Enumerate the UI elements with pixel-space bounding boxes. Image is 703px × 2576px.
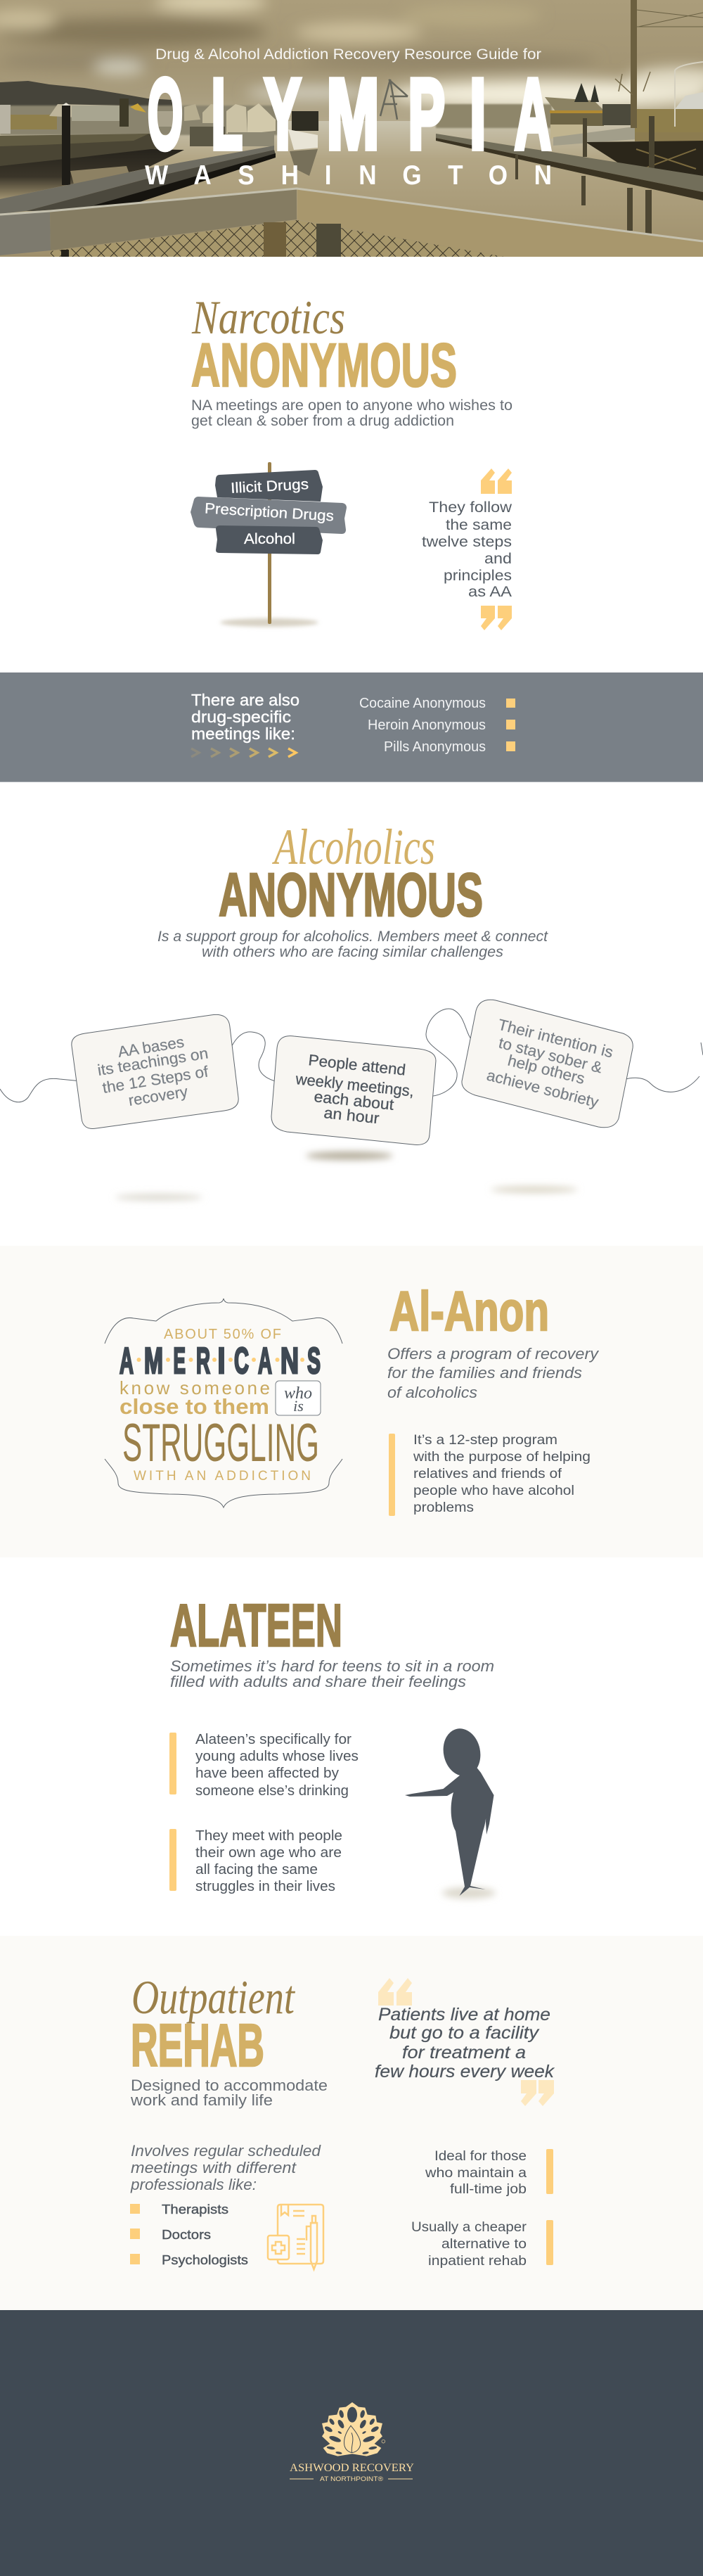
reflections bbox=[515, 155, 652, 234]
Americans: N bbox=[280, 1341, 299, 1382]
boat bbox=[288, 129, 318, 150]
intro text: NA meetings are open to anyone who wishes to bbox=[191, 397, 512, 414]
heading: Alcoholics: Alcoholics bbox=[272, 819, 435, 875]
accent bar bbox=[389, 1434, 395, 1516]
about 50 percent: ABOUT 50% OF bbox=[164, 1327, 281, 1342]
tag: stay sober: help others bbox=[506, 1052, 587, 1088]
quote text: principles bbox=[444, 567, 512, 584]
tag: weekly meetings: each about bbox=[313, 1088, 394, 1114]
icon: signpost: Alcohol bbox=[244, 531, 295, 547]
point: cheaper alternative: Usually a cheaper bbox=[411, 2220, 527, 2235]
tag: AA teachings: AA bases bbox=[117, 1033, 186, 1061]
hero title: Olympia: A bbox=[515, 58, 551, 170]
quote text: the same bbox=[446, 516, 512, 533]
point: same age: They meet with people bbox=[195, 1828, 342, 1844]
intro text: get clean & sober from a drug addiction bbox=[191, 413, 454, 429]
panel: Alcoholics Anonymous bbox=[0, 819, 703, 1201]
footer bbox=[0, 2310, 703, 2576]
point: cheaper alternative bbox=[411, 2220, 527, 2269]
intro text bbox=[387, 1345, 600, 1401]
icon: closing quote bbox=[521, 2080, 554, 2106]
point: same age: all facing the same bbox=[195, 1862, 318, 1877]
heading: Anonymous: ANONYMOUS bbox=[191, 331, 457, 400]
list of drug-specific groups bbox=[359, 696, 486, 755]
tag: stay sober: to stay sober & bbox=[497, 1034, 605, 1076]
Americans: R bbox=[196, 1341, 210, 1382]
list of drug-specific groups: Pills Anonymous bbox=[384, 739, 486, 755]
list of drug-specific groups: Heroin Anonymous bbox=[368, 718, 486, 733]
hero banner bbox=[0, 0, 703, 257]
intro text bbox=[191, 397, 512, 429]
intro text: Offers a program of recovery bbox=[387, 1345, 600, 1363]
quote text bbox=[375, 2005, 555, 2081]
tag shadows bbox=[115, 1152, 578, 1201]
quote text: Patients live at home bbox=[378, 2005, 550, 2025]
intro text: filled with adults and share their feelings bbox=[170, 1673, 466, 1690]
quote text: few hours every week bbox=[375, 2062, 555, 2081]
tag: AA teachings bbox=[72, 1014, 238, 1128]
12-step text: with the purpose of helping bbox=[413, 1450, 591, 1465]
hero title: Olympia: M bbox=[326, 58, 380, 170]
hero photo: marina bbox=[0, 0, 703, 257]
drug-specific heading bbox=[191, 691, 299, 743]
heading: Rehab: REHAB bbox=[131, 2013, 264, 2079]
intro text: for the families and friends bbox=[387, 1364, 582, 1382]
professionals text: Involves regular scheduled bbox=[131, 2142, 321, 2160]
tag: weekly meetings bbox=[271, 1036, 436, 1144]
point: full-time job: full-time job bbox=[450, 2182, 527, 2197]
who is box: who bbox=[284, 1384, 312, 1403]
tag: stay sober: Their intention is bbox=[496, 1016, 615, 1061]
Americans: C bbox=[234, 1341, 249, 1382]
know someone: know someone bbox=[120, 1377, 270, 1398]
tag: stay sober: achieve sobriety bbox=[485, 1066, 600, 1111]
icon: opening quote bbox=[378, 1978, 412, 2006]
hero title: Olympia: O bbox=[148, 58, 183, 170]
wires connecting the tags bbox=[0, 1009, 703, 1102]
icon: signpost bbox=[191, 462, 347, 627]
icon: person silhouette bbox=[405, 1725, 496, 1899]
accent bar bbox=[169, 1829, 176, 1891]
professionals text: meetings with different bbox=[131, 2159, 297, 2176]
point: same age bbox=[195, 1828, 342, 1894]
point: full-time job: Ideal for those bbox=[434, 2149, 527, 2164]
hero intro line: Drug & Alcohol Addiction Recovery Resource Guide for bbox=[155, 46, 541, 63]
tag: AA teachings: its teachings on bbox=[96, 1044, 209, 1079]
point: young adults: Alateen’s specifically for bbox=[195, 1732, 352, 1747]
crane bbox=[380, 79, 408, 120]
drug-specific heading: There are also bbox=[191, 691, 299, 709]
fence bbox=[51, 220, 504, 257]
struggling: STRUGGLING bbox=[122, 1413, 319, 1473]
tag: weekly meetings: People attend bbox=[307, 1051, 406, 1079]
quote text: as AA bbox=[468, 583, 512, 600]
heading: Narcotics: Narcotics bbox=[191, 291, 345, 344]
professionals list bbox=[130, 2202, 248, 2267]
accent bar bbox=[546, 2220, 553, 2265]
point: young adults: have been affected by bbox=[195, 1766, 339, 1781]
panel: Narcotics Anonymous bbox=[191, 291, 512, 630]
panel: Outpatient Rehab bbox=[0, 1936, 703, 2310]
railing bbox=[0, 211, 51, 255]
shore bbox=[0, 134, 176, 170]
intro text: of alcoholics bbox=[387, 1384, 477, 1401]
list bullets bbox=[506, 699, 515, 751]
tag: stay sober bbox=[462, 1000, 633, 1128]
professionals list: Doctors bbox=[162, 2227, 211, 2242]
drug-specific heading: meetings like: bbox=[191, 725, 295, 743]
point: full-time job bbox=[425, 2149, 527, 2197]
quote text: for treatment a bbox=[402, 2043, 526, 2062]
intro text bbox=[157, 929, 548, 960]
point: cheaper alternative: alternative to bbox=[441, 2237, 527, 2252]
hero title: Olympia: L bbox=[211, 58, 243, 170]
intro text: with others who are facing similar challenges bbox=[202, 944, 504, 960]
with an addiction: WITH AN ADDICTION bbox=[134, 1469, 311, 1484]
hero title: Olympia: P bbox=[408, 58, 445, 170]
panel: Alateen bbox=[169, 1593, 496, 1899]
panel: drug-specific meetings bbox=[0, 672, 703, 782]
close to them: close to them bbox=[120, 1394, 269, 1419]
logo rules bbox=[290, 2479, 413, 2480]
Americans: A bbox=[120, 1341, 134, 1382]
12-step text: people who have alcohol bbox=[413, 1484, 574, 1498]
logo wordmark: ASHWOOD RECOVERY bbox=[290, 2462, 414, 2474]
Americans: I bbox=[218, 1341, 225, 1382]
tag: AA teachings: the 12 Steps of bbox=[101, 1062, 210, 1097]
quote text: twelve steps bbox=[422, 533, 512, 550]
statistic badge bbox=[105, 1299, 342, 1507]
12-step text: It’s a 12-step program bbox=[413, 1433, 557, 1448]
intro text: Is a support group for alcoholics. Members meet & connect bbox=[157, 929, 548, 945]
professionals list: Psychologists bbox=[162, 2252, 248, 2267]
point: same age: their own age who are bbox=[195, 1845, 342, 1861]
heading: Al-Anon: Al-Anon bbox=[389, 1280, 549, 1342]
drug-specific heading: drug-specific bbox=[191, 708, 291, 726]
quote text bbox=[422, 499, 512, 600]
tag: AA teachings: recovery bbox=[127, 1083, 189, 1109]
heading: Alateen: ALATEEN bbox=[170, 1593, 342, 1659]
icon: closing quote bbox=[481, 606, 512, 630]
logo strapline: AT NORTHPOINT® bbox=[320, 2475, 383, 2483]
professionals text bbox=[130, 2142, 321, 2193]
icon: medical notebook bbox=[268, 2205, 323, 2269]
Americans: A bbox=[258, 1341, 272, 1382]
point: young adults: young adults whose lives bbox=[195, 1749, 359, 1764]
chevrons bbox=[191, 748, 296, 757]
intro text: Designed to accommodate bbox=[131, 2077, 328, 2094]
list of drug-specific groups: Cocaine Anonymous bbox=[359, 696, 486, 711]
right pier bbox=[436, 134, 703, 192]
quote text: They follow bbox=[429, 499, 512, 516]
far bank, centre and right bbox=[436, 104, 552, 128]
accent bar bbox=[546, 2149, 553, 2194]
12-step text: relatives and friends of bbox=[413, 1467, 562, 1481]
tag: weekly meetings: weekly meetings, bbox=[294, 1070, 415, 1100]
professionals list: Therapists bbox=[162, 2202, 228, 2217]
intro text: Sometimes it’s hard for teens to sit in a room bbox=[170, 1657, 494, 1675]
point: same age: struggles in their lives bbox=[195, 1879, 335, 1894]
icon: signpost: Illicit Drugs bbox=[231, 476, 309, 497]
accent bar bbox=[169, 1733, 176, 1794]
Americans: E bbox=[173, 1341, 186, 1382]
dots bbox=[136, 1358, 304, 1362]
professionals text: professionals like: bbox=[130, 2176, 257, 2193]
12-step text: problems bbox=[413, 1500, 474, 1515]
hero subtitle: Washington: WASHINGTON bbox=[145, 159, 552, 190]
left pier bbox=[0, 146, 274, 214]
intro text bbox=[170, 1657, 494, 1690]
Americans: M bbox=[144, 1341, 163, 1382]
intro text: work and family life bbox=[130, 2091, 273, 2109]
point: young adults: someone else’s drinking bbox=[195, 1783, 349, 1799]
point: full-time job: who maintain a bbox=[425, 2166, 527, 2181]
quote text: and bbox=[484, 550, 512, 567]
12-step text bbox=[413, 1433, 591, 1515]
panel: Al-Anon bbox=[0, 1246, 703, 1557]
utility pole, lamp and wires bbox=[631, 0, 637, 128]
icon: opening quote bbox=[481, 468, 512, 494]
hero title: Olympia: I bbox=[470, 58, 486, 170]
quote text: but go to a facility bbox=[389, 2023, 540, 2043]
intro text bbox=[130, 2077, 328, 2109]
point: cheaper alternative: inpatient rehab bbox=[428, 2254, 527, 2269]
icon: signpost: Prescription Drugs bbox=[204, 500, 334, 525]
decorative frame bbox=[105, 1299, 342, 1507]
logo mark bbox=[322, 2402, 385, 2456]
hero title: Olympia: Y bbox=[264, 58, 301, 170]
heading: Outpatient: Outpatient bbox=[131, 1970, 296, 2024]
far bank, left bbox=[0, 81, 172, 120]
who is box: is bbox=[293, 1397, 304, 1415]
heading: Anonymous: ANONYMOUS bbox=[219, 861, 483, 929]
Americans: S bbox=[307, 1341, 321, 1382]
tag: weekly meetings: an hour bbox=[323, 1104, 380, 1127]
who is box bbox=[276, 1381, 321, 1415]
point: young adults bbox=[195, 1732, 359, 1799]
